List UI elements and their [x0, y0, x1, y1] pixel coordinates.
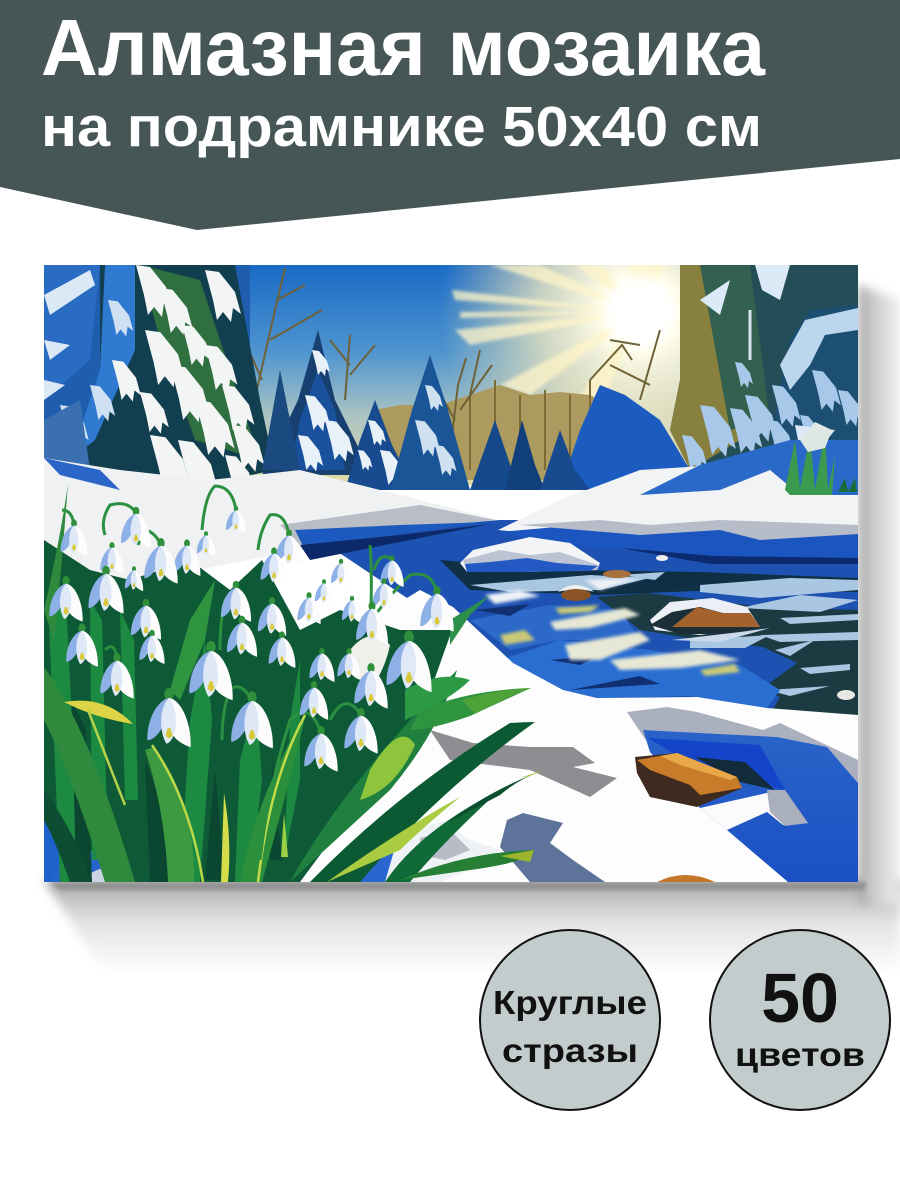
snow mound on river: [460, 537, 600, 572]
badge: round rhinestones: Круглые: [493, 984, 647, 1021]
header banner: [0, 0, 900, 230]
painting: snowdrops and winter river: [44, 265, 858, 882]
foreground snow: [240, 590, 858, 882]
right snow bank: [498, 440, 858, 564]
small rocks: [558, 555, 855, 700]
river light streaks: [470, 572, 858, 696]
sky with sun: [250, 265, 688, 491]
badge: round rhinestones: [480, 930, 660, 1110]
badge: round rhinestones: стразы: [502, 1032, 638, 1069]
snow clumps bottom left: [44, 820, 105, 882]
distant golden trees: [240, 268, 660, 480]
river base: [340, 520, 858, 715]
badge: 50 colours: [710, 930, 890, 1110]
white blossom: [350, 636, 390, 680]
mid rock: [650, 598, 770, 642]
river foam: [485, 578, 740, 676]
left snow bank: [44, 458, 500, 579]
subtitle: на подрамнике 50х40 см: [41, 95, 762, 159]
snowdrop flowers: [49, 506, 454, 772]
small grass clump: [785, 422, 857, 495]
badge: 50 colours: цветов: [735, 1036, 865, 1073]
right forest: [670, 265, 863, 471]
canvas shadow: [44, 285, 900, 975]
badge: 50 colours: 50: [761, 959, 839, 1037]
snowdrop leaves: [44, 484, 544, 882]
title: Алмазная мозаика: [41, 3, 765, 92]
large orange rock: [635, 753, 775, 882]
mid distance spruces: [262, 330, 690, 490]
river dark water: [597, 593, 858, 720]
large left spruce: [44, 265, 300, 497]
